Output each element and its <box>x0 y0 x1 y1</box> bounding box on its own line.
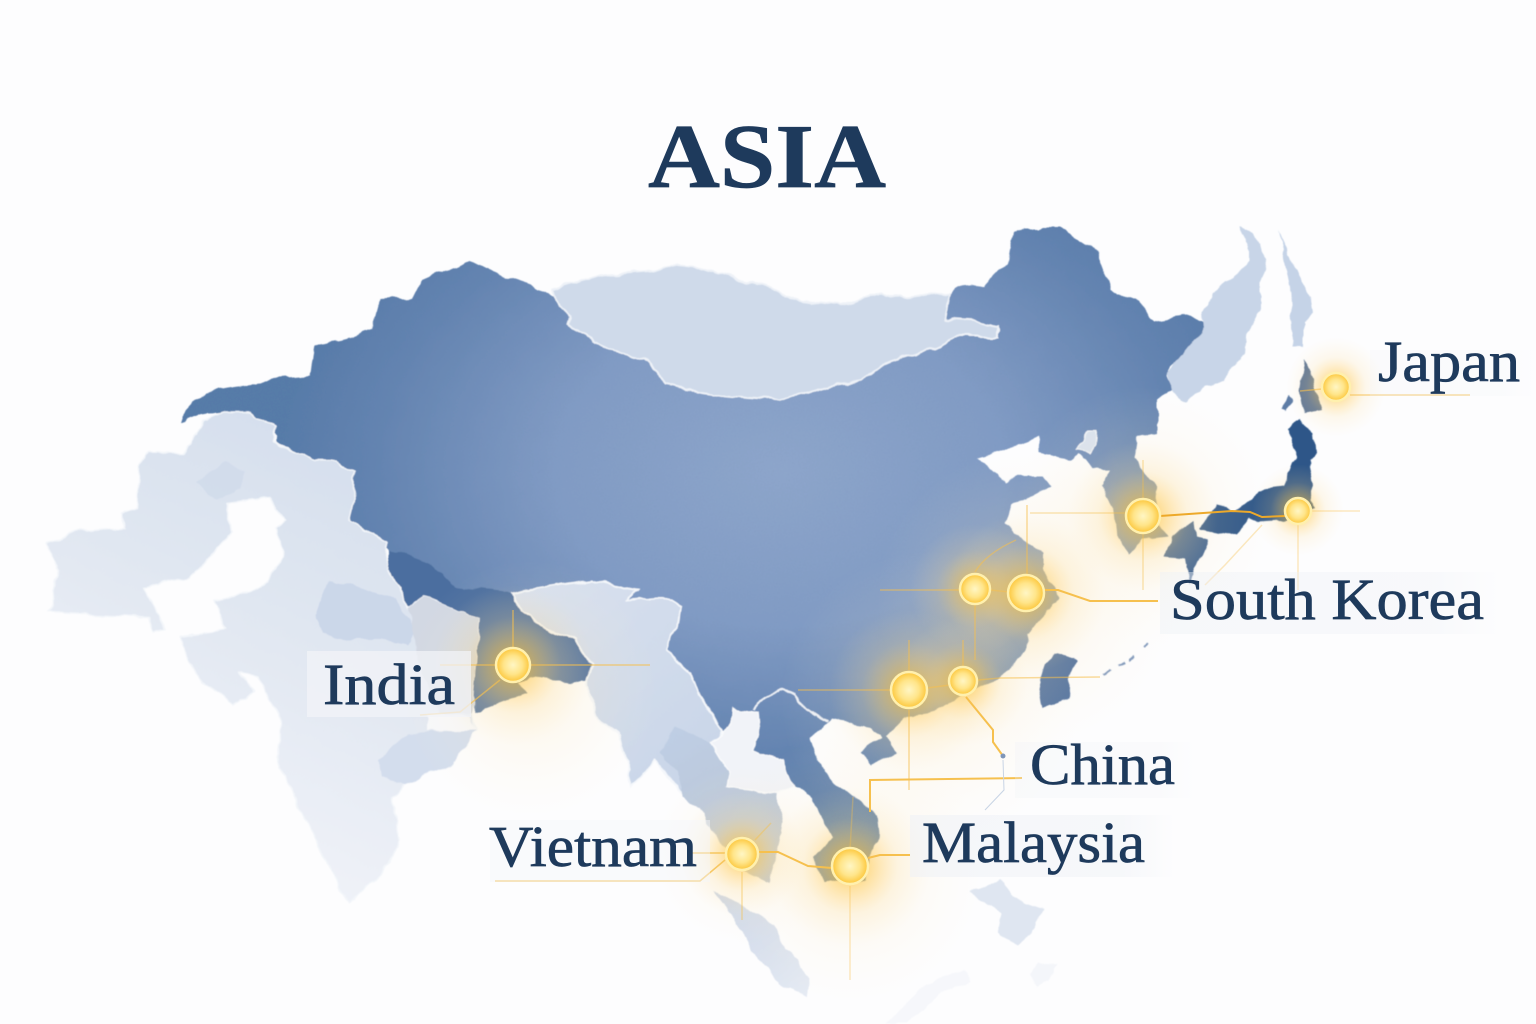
connector: China label <box>966 697 1003 756</box>
region: grey-warm Bihar area <box>409 597 479 715</box>
region: Java <box>885 968 972 1024</box>
region: Thailand and Cambodia <box>660 727 783 882</box>
connector: Malaysia label <box>868 855 910 858</box>
label: South Korea: South Korea <box>1170 567 1484 632</box>
region: Taiwan <box>1038 653 1077 708</box>
region: central India shading <box>316 580 416 645</box>
label: Japan: Japan <box>1378 329 1520 394</box>
region: Yellow Sea lake <box>1076 430 1097 452</box>
connector: Malaysia upper <box>870 778 1022 812</box>
connector: Vietnam to Malaysia <box>758 852 832 868</box>
region: east India shading <box>380 730 476 783</box>
connector: India <box>420 610 650 715</box>
connector: Malaysia rays <box>850 797 853 980</box>
region: small Japanese island <box>1281 395 1292 411</box>
region: South Asia <box>48 412 479 903</box>
region: Sumatra <box>713 890 810 997</box>
connector: Vietnam label <box>495 853 725 881</box>
label: Vietnam: Vietnam <box>489 814 697 879</box>
label backing gap: pale notch <box>427 715 476 731</box>
faint line: island arc <box>985 760 1004 810</box>
label: China: China <box>1030 732 1175 797</box>
connector: China cluster east <box>880 505 1027 660</box>
connector: South Korea label <box>1044 590 1158 601</box>
region: Sulawesi <box>1030 962 1056 985</box>
region: Kashmir shading <box>196 462 246 498</box>
glow halos <box>400 337 1386 1005</box>
city markers <box>496 373 1350 884</box>
region: Kamchatka strip <box>1278 228 1313 347</box>
marker: Korea <box>1126 499 1160 533</box>
marker: Vietnam <box>726 838 758 870</box>
marker: China Guangdong east <box>949 667 977 695</box>
marker: Japan north <box>1322 373 1350 401</box>
region: pale Gulf highlands <box>711 708 794 793</box>
region: Russian far east <box>1167 227 1268 402</box>
connector: Japan <box>1300 389 1470 395</box>
marker: China Guangdong west <box>891 672 927 708</box>
connector: Korea to Japan <box>1160 511 1285 517</box>
marker: China label dot <box>1000 754 1006 758</box>
marker: Malaysia <box>832 848 868 884</box>
title: ASIA <box>648 106 886 207</box>
region: Myanmar and mainland strip <box>512 580 730 797</box>
region: Ryukyu islands <box>1103 642 1148 674</box>
labels <box>307 329 1536 882</box>
region: Kyushu <box>1165 520 1208 583</box>
border line: Laos <box>754 688 829 722</box>
region: central and east Asia <box>180 228 1206 883</box>
connector lines <box>420 389 1470 980</box>
connector: Japan south rays <box>1205 511 1360 590</box>
map of Asia <box>48 227 1322 1024</box>
region: Borneo <box>969 877 1044 945</box>
marker: India <box>496 648 530 682</box>
marker: China Shanghai <box>1008 575 1044 611</box>
texture: watercolor grain <box>180 228 1206 883</box>
connector: China cluster south <box>798 640 1100 790</box>
region: Hokkaido <box>1300 360 1322 415</box>
region: Nepal and Bangladesh dark band <box>387 550 592 712</box>
region: Honshu <box>1200 420 1316 537</box>
connector: Vietnam rays <box>742 823 771 920</box>
marker: China inland <box>960 574 990 604</box>
label: India: India <box>323 652 455 717</box>
connector: Korea rays <box>1030 460 1143 590</box>
region: Mongolia <box>552 265 998 400</box>
marker: Japan south <box>1285 498 1311 524</box>
label: Malaysia: Malaysia <box>922 810 1145 875</box>
